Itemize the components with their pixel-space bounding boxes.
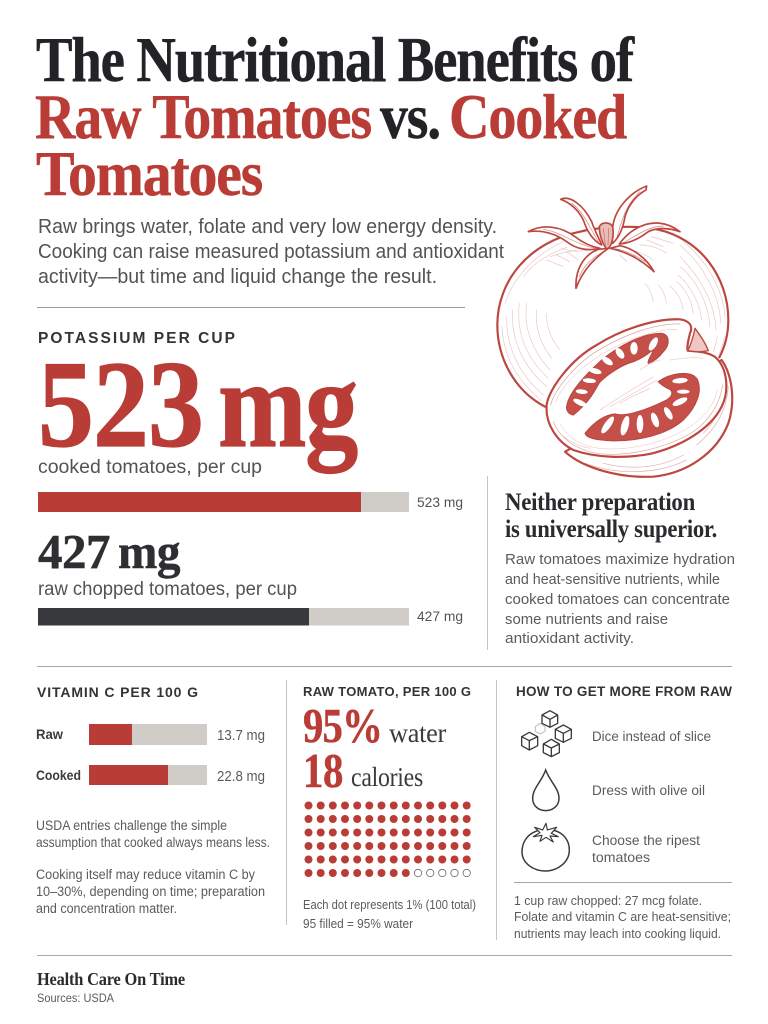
footer [37,969,185,1005]
stat: 427 mg: 427 [38,524,110,579]
panel: potassium per cup [38,330,463,626]
title: Cooked [449,82,627,152]
icon: oil drop [533,770,559,811]
dot grid caption [303,898,476,931]
stat: 95% water: water [389,718,446,748]
dot grid [304,802,471,877]
title: Tomatoes [36,139,262,209]
icon: tomato outline [522,823,569,871]
title: Raw Tomatoes [35,82,371,152]
bar: cooked potassium: 523 mg [417,494,463,510]
verdict text [505,552,735,647]
bar: raw potassium: 427 mg [417,608,463,624]
intro text: Cooking can raise measured potassium and antioxidant [38,241,504,263]
stat: 18 calories: 18 [303,743,343,798]
lower seed cavity [585,373,699,441]
dot grid caption: Each dot represents 1% (100 total) [303,898,476,912]
vitamin C note [36,818,270,916]
intro text: activity—but time and liquid change the result. [38,266,437,288]
bar: raw vitamin C: 13.7 mg [217,728,265,744]
tips heading: HOW TO GET MORE FROM RAW [516,684,732,699]
verdict heading: Neither preparation [505,489,695,516]
big stat: 523 mg [38,336,357,474]
dot grid caption: 95 filled = 95% water [303,917,413,931]
verdict heading: is universally superior. [505,516,717,543]
vitamin C note: Cooking itself may reduce vitamin C by [36,867,255,882]
tip text: olive oil: Dress with olive oil [592,782,705,798]
title: vs. [380,82,440,152]
bar: cooked potassium [38,492,463,512]
verdict text: and heat-sensitive nutrients, while [505,572,720,588]
bar: raw potassium [38,608,463,626]
halved tomato [547,319,732,477]
bar: cooked vitamin C: Cooked [36,767,81,783]
sources: Sources: USDA [37,991,114,1005]
raw tomato heading: RAW TOMATO, PER 100 G [303,684,471,699]
panel: verdict [505,489,735,647]
verdict heading [505,489,717,543]
folate note: 1 cup raw chopped: 27 mcg folate. [514,893,702,908]
stat: 18 calories: calories [351,762,423,792]
intro text [38,216,504,288]
upper seed cavity [567,333,668,415]
verdict text: cooked tomatoes can concentrate [505,592,730,608]
vitamin C note: assumption that cooked always means less. [36,835,270,850]
verdict text: Raw tomatoes maximize hydration [505,552,735,568]
panel: vitamin C [36,684,270,916]
stem notch [688,328,708,352]
bar: cooked vitamin C [36,765,265,785]
intro text: Raw brings water, folate and very low energy density. [38,216,497,238]
stat: 18 calories [303,743,423,798]
publisher name: Health Care On Time [37,969,185,989]
folate note: Folate and vitamin C are heat-sensitive; [514,909,731,924]
vitamin C heading: VITAMIN C PER 100 G [37,684,198,700]
bar: raw vitamin C [36,724,265,745]
potassium heading: POTASSIUM PER CUP [38,330,235,347]
tip text: ripest: Choose the ripest [592,832,700,848]
verdict text: antioxidant activity. [505,631,634,647]
stat: 95% water [303,698,446,753]
verdict text: some nutrients and raise [505,612,668,628]
stat: 427 mg [38,524,181,579]
title: The Nutritional Benefits of [36,25,635,95]
title [35,25,635,209]
big stat: 523 mg: 523 [38,336,203,473]
outer rim of half [565,360,732,477]
bar: cooked vitamin C: 22.8 mg [217,769,265,785]
illustration: whole and halved tomato [497,186,732,477]
vitamin C note: USDA entries challenge the simple [36,818,227,833]
folate note: nutrients may leach into cooking liquid. [514,926,721,941]
bar: raw vitamin C: Raw [36,726,63,742]
tip text: ripest: tomatoes [592,849,650,865]
vitamin C note: and concentration matter. [36,901,177,916]
panel: raw tomato per 100 g [303,684,476,931]
tip text: ripest [592,832,700,865]
big stat: 523 mg: mg [218,336,357,474]
cooked label: cooked tomatoes, per cup [38,456,262,478]
folate note [514,893,731,941]
whole tomato [497,227,728,407]
vitamin C note: 10–30%, depending on time; preparation [36,884,265,899]
tip text: dice: Dice instead of slice [592,728,711,744]
stat: 427 mg: mg [118,524,181,579]
raw label: raw chopped tomatoes, per cup [38,579,297,600]
cut face [547,319,726,457]
stat: 95% water: 95% [303,698,382,753]
panel: how to get more from raw [514,684,732,941]
stem and sepals [528,186,680,288]
icon: diced cubes [522,711,571,757]
